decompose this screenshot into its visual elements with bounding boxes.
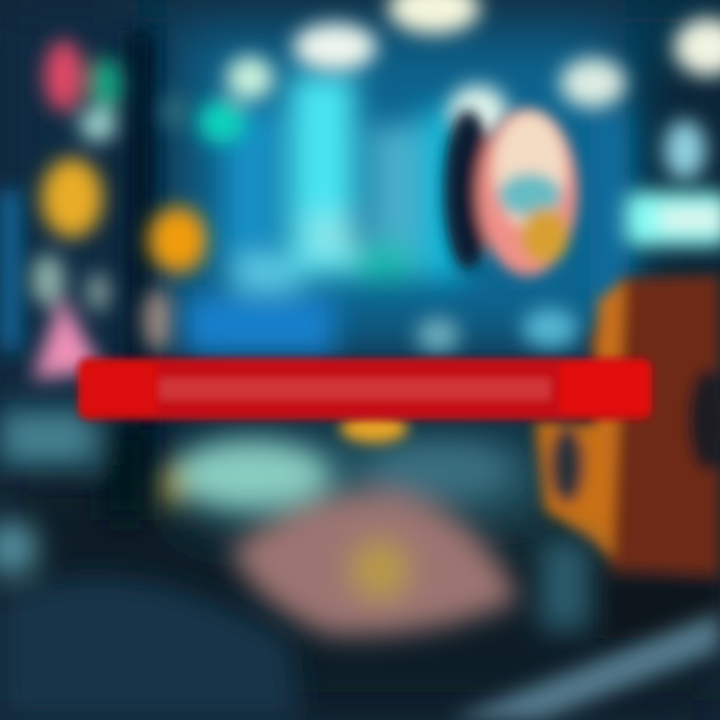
hand (156, 441, 520, 636)
white light spots (198, 0, 720, 353)
brown box on the right (535, 275, 720, 638)
desk edge (450, 612, 720, 720)
ring gauge (444, 108, 578, 276)
dark sleeve and keyboard (0, 410, 590, 720)
right bright bar (625, 192, 720, 246)
red banner (78, 358, 652, 420)
left dark column (0, 30, 155, 480)
cyan chart bars (185, 75, 630, 354)
orange tab under banner (340, 413, 408, 443)
left panel icons (31, 40, 208, 380)
